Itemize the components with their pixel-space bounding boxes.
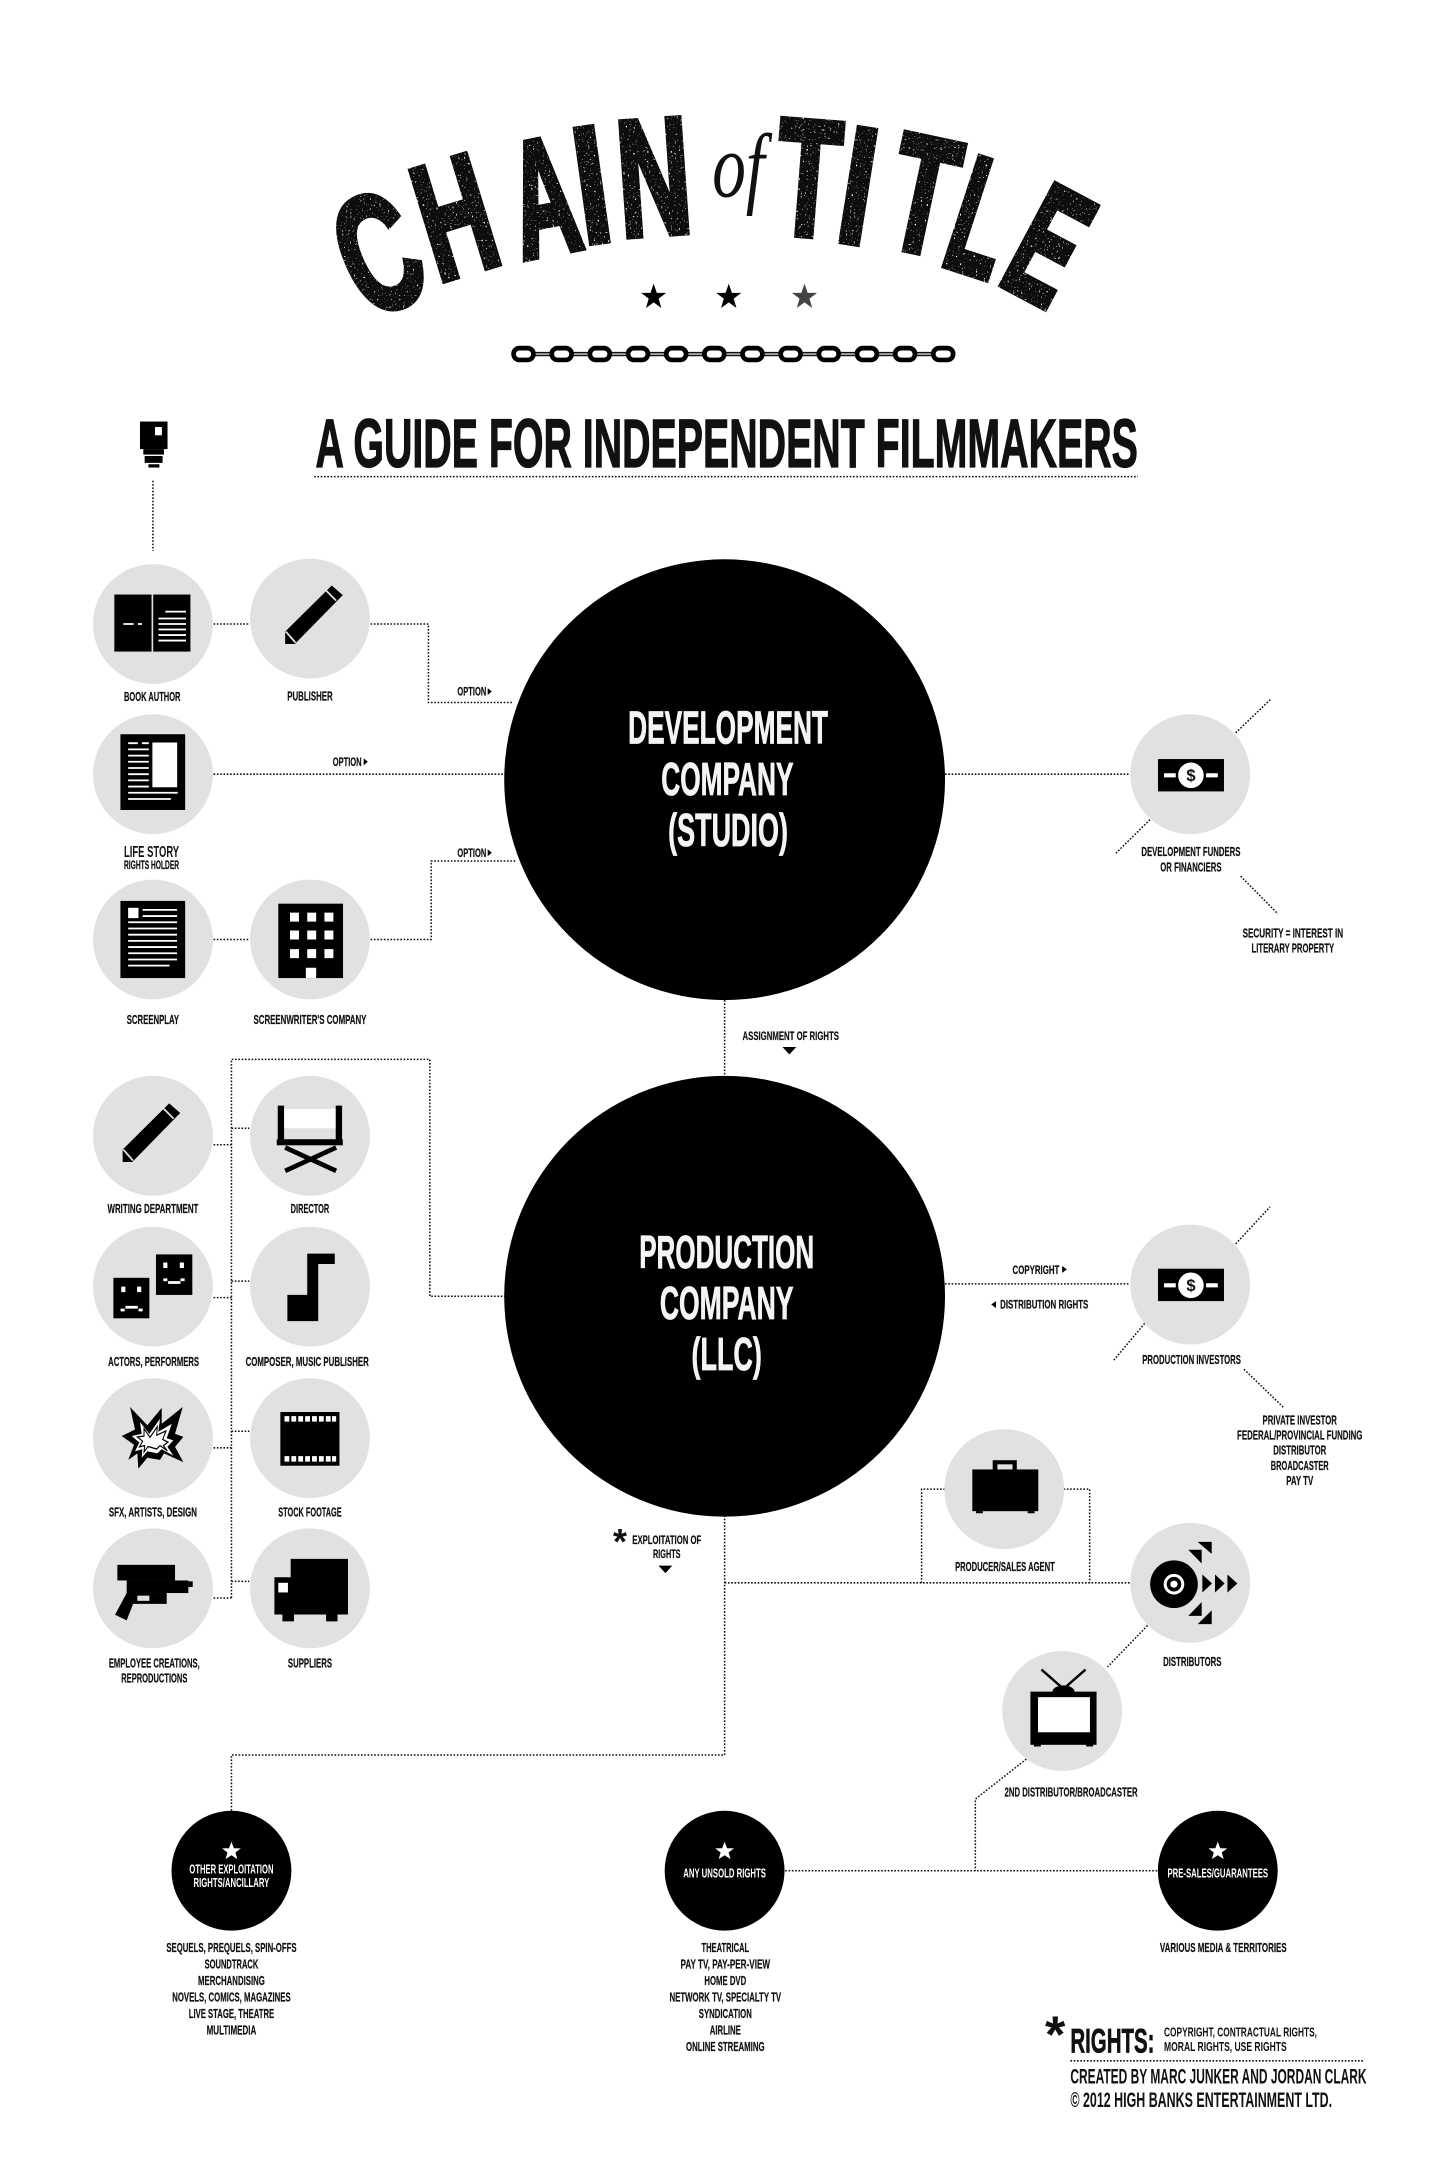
title letters: T (769, 85, 847, 273)
various media note: VARIOUS MEDIA & TERRITORIES (1160, 1940, 1287, 1955)
node: sfx, artists, design (93, 1378, 213, 1520)
title letters: C (307, 154, 450, 353)
node: suppliers (250, 1528, 370, 1671)
node: employee creations, reproductions (93, 1528, 213, 1686)
node: actors, performers (93, 1227, 213, 1369)
node: production investors: PRODUCTION INVESTORS (1142, 1352, 1241, 1367)
title letters: A (494, 102, 593, 295)
list: distribution windows: ONLINE STREAMING (686, 2039, 765, 2054)
copyright and distribution rights labels: DISTRIBUTION RIGHTS (1000, 1299, 1088, 1312)
investor types list: PRIVATE INVESTOR (1263, 1412, 1337, 1427)
panel: production company: (LLC) (692, 1328, 762, 1380)
panel: development company (504, 559, 945, 1000)
list: ancillary rights (166, 1940, 297, 2038)
node: screenplay: SCREENPLAY (127, 1012, 179, 1027)
node: other exploitation rights (172, 1811, 291, 1931)
title letters (307, 83, 1119, 353)
node: publisher (250, 559, 370, 703)
rights legend and credits: MORAL RIGHTS, USE RIGHTS (1164, 2039, 1287, 2054)
option labels: OPTION (333, 756, 362, 769)
exploitation of rights label: EXPLOITATION OF (632, 1534, 701, 1547)
node: composer, music publisher: COMPOSER, MUSIC PUBLISHER (246, 1354, 369, 1369)
list: ancillary rights: SEQUELS, PREQUELS, SPIN-OFFS (166, 1940, 297, 1955)
panel: production company: PRODUCTION (639, 1226, 814, 1278)
security note: SECURITY = INTEREST IN (1243, 925, 1343, 940)
copyright and distribution rights labels: COPYRIGHT (1013, 1264, 1060, 1277)
list: distribution windows (670, 1940, 781, 2054)
node: other exploitation rights: RIGHTS/ANCILLARY (194, 1875, 270, 1890)
copyright and distribution rights labels (991, 1264, 1088, 1312)
node: publisher: PUBLISHER (287, 688, 333, 703)
node: 2nd distributor/broadcaster (1002, 1651, 1138, 1799)
list: ancillary rights: MERCHANDISING (198, 1973, 265, 1988)
panel: development company: (STUDIO) (668, 804, 788, 856)
node: any unsold rights (665, 1811, 785, 1931)
list: distribution windows: PAY TV, PAY-PER-VIEW (681, 1957, 771, 1972)
security note (1243, 925, 1343, 956)
node: book author: BOOK AUTHOR (124, 689, 181, 704)
title letters: T (873, 99, 974, 292)
list: distribution windows: SYNDICATION (699, 2006, 752, 2021)
node: screenwriter's company (250, 880, 370, 1027)
node: employee creations, reproductions: REPRODUCTIONS (121, 1671, 188, 1686)
node: writing department (93, 1076, 213, 1216)
rights legend and credits: * (1045, 2007, 1066, 2065)
node: writing department: WRITING DEPARTMENT (107, 1201, 198, 1216)
title letters: N (611, 83, 697, 273)
panel: production company: COMPANY (660, 1277, 794, 1329)
node: development funders or financiers: $ (1186, 766, 1196, 785)
panel: development company: DEVELOPMENT (628, 701, 828, 753)
icon: three stars (641, 284, 817, 308)
panel: development company: COMPANY (661, 753, 794, 805)
exploitation of rights label: * (613, 1522, 627, 1562)
list: ancillary rights: LIVE STAGE, THEATRE (189, 2006, 274, 2021)
rights legend and credits: RIGHTS: (1070, 2023, 1154, 2061)
exploitation of rights label: RIGHTS (653, 1548, 681, 1561)
list: ancillary rights: MULTIMEDIA (207, 2023, 256, 2038)
node: production investors (1130, 1225, 1250, 1367)
node: development funders or financiers: DEVELOPMENT FUNDERS (1141, 844, 1241, 859)
option labels (333, 686, 492, 860)
node: actors, performers: ACTORS, PERFORMERS (108, 1354, 199, 1369)
option labels: OPTION (457, 686, 486, 699)
assignment of rights label (743, 1030, 839, 1055)
node: producer/sales agent (944, 1429, 1064, 1574)
title letters: E (979, 150, 1119, 342)
list: distribution windows: NETWORK TV, SPECIALTY TV (670, 1990, 781, 2005)
rights legend and credits (1045, 2007, 1367, 2112)
node: production investors: $ (1186, 1276, 1196, 1295)
node: other exploitation rights: OTHER EXPLOITATION (189, 1861, 273, 1876)
node: development funders or financiers: OR FINANCIERS (1160, 859, 1222, 874)
node: pre-sales/guarantees (1158, 1811, 1278, 1931)
node: suppliers: SUPPLIERS (288, 1656, 332, 1671)
exploitation of rights label (613, 1522, 701, 1573)
list: ancillary rights: SOUNDTRACK (205, 1957, 259, 1972)
node: book author (93, 564, 213, 704)
list: distribution windows: THEATRICAL (701, 1940, 749, 1955)
script word "of": of (712, 115, 773, 216)
node: composer, music publisher (246, 1227, 370, 1369)
node: life story rights holder: RIGHTS HOLDER (124, 859, 179, 872)
rights legend and credits: COPYRIGHT, CONTRACTUAL RIGHTS, (1164, 2025, 1317, 2040)
title letters: I (828, 93, 889, 280)
node: employee creations, reproductions: EMPLOYEE CREATIONS, (109, 1656, 200, 1671)
investor types list: PAY TV (1286, 1473, 1313, 1488)
assignment of rights label: ASSIGNMENT OF RIGHTS (743, 1030, 839, 1043)
icon: tie clip plug (140, 422, 168, 468)
node: distributors (1130, 1523, 1250, 1669)
title letters: H (394, 119, 516, 316)
node: any unsold rights: ANY UNSOLD RIGHTS (683, 1866, 766, 1881)
node: screenwriter's company: SCREENWRITER'S COMPANY (253, 1012, 367, 1027)
node: distributors: DISTRIBUTORS (1163, 1654, 1222, 1669)
option labels: OPTION (457, 847, 486, 860)
node: stock footage (250, 1378, 370, 1520)
list: distribution windows: HOME DVD (704, 1973, 746, 1988)
node: stock footage: STOCK FOOTAGE (278, 1505, 342, 1520)
node: development funders or financiers (1130, 714, 1250, 874)
icon: chain (514, 348, 953, 360)
node: 2nd distributor/broadcaster: 2ND DISTRIBUTOR/BROADCASTER (1005, 1784, 1138, 1799)
investor types list: BROADCASTER (1271, 1458, 1329, 1473)
node: sfx, artists, design: SFX, ARTISTS, DESIGN (109, 1505, 197, 1520)
list: distribution windows: AIRLINE (710, 2023, 741, 2038)
connector lines (153, 481, 1284, 1871)
node: director: DIRECTOR (291, 1201, 330, 1216)
node: director (250, 1076, 370, 1216)
node: life story rights holder: LIFE STORY (124, 844, 179, 861)
list: ancillary rights: NOVELS, COMICS, MAGAZINES (172, 1990, 291, 2005)
node: life story rights holder (93, 714, 213, 872)
title letters: I (563, 92, 621, 279)
panel: production company (504, 1076, 945, 1517)
title: Chain of Title (307, 83, 1119, 353)
security note: LITERARY PROPERTY (1252, 941, 1334, 956)
investor types list (1237, 1412, 1362, 1488)
title letters: L (927, 123, 1036, 315)
investor types list: DISTRIBUTOR (1273, 1443, 1327, 1458)
node: pre-sales/guarantees: PRE-SALES/GUARANTEES (1167, 1866, 1268, 1881)
node: screenplay (93, 880, 213, 1027)
node: producer/sales agent: PRODUCER/SALES AGENT (955, 1559, 1055, 1574)
investor types list: FEDERAL/PROVINCIAL FUNDING (1237, 1428, 1362, 1443)
